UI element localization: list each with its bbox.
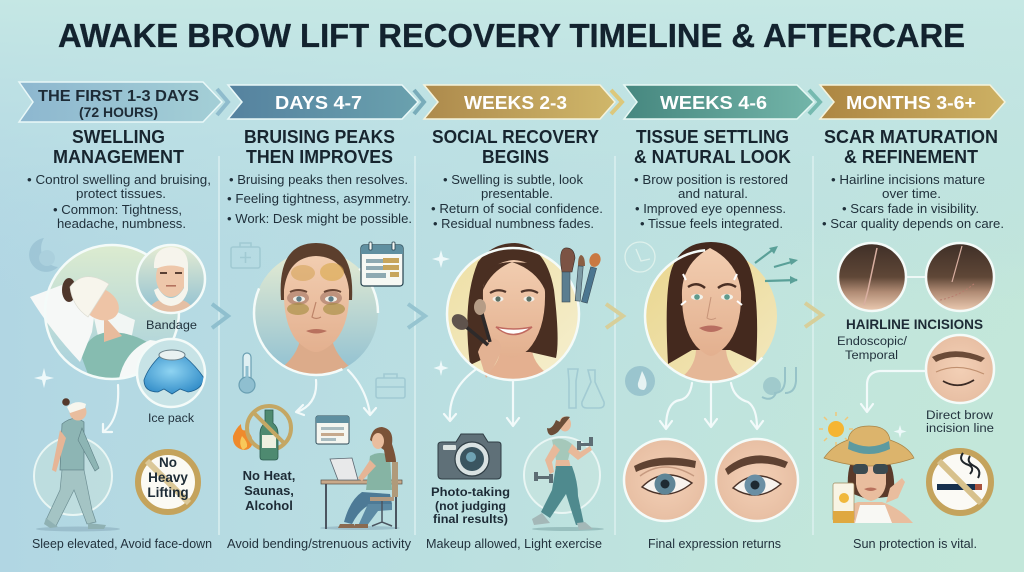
sparkles bbox=[432, 250, 450, 376]
caption: Makeup allowed, Light exercise bbox=[426, 537, 602, 551]
bullet text: tissue settling bbox=[634, 173, 788, 231]
icon: briefcase bbox=[376, 374, 405, 398]
icons: pale drop and stethoscope bbox=[625, 366, 796, 399]
icon: calendar bbox=[361, 242, 403, 286]
ribbon: days 4-7: DAYS 4-7 bbox=[275, 93, 362, 113]
panel: first 1-3 days bbox=[19, 82, 228, 551]
label: no heat bbox=[243, 468, 295, 513]
ribbon: months 3-6+: MONTHS 3-6+ bbox=[846, 93, 976, 113]
heading: bruising peaks bbox=[244, 127, 395, 167]
arrow: column 3 to 4 bbox=[606, 304, 623, 328]
heading: bruising peaks: BRUISING PEAKS bbox=[244, 127, 395, 147]
sparkle bbox=[894, 425, 906, 438]
arrow: column 1 to 2 bbox=[212, 304, 228, 328]
icon: no heavy lifting: Heavy bbox=[148, 470, 188, 485]
sparkle bbox=[34, 368, 54, 388]
bullet text: swelling management: • Control swelling and bruising, bbox=[27, 173, 211, 187]
label: endoscopic temporal bbox=[837, 336, 908, 362]
heading: swelling management bbox=[53, 127, 184, 167]
ribbon: the first 1-3 days bbox=[19, 82, 228, 122]
bullet text: scar maturation: • Scars fade in visibility. bbox=[842, 202, 979, 216]
illustration: woman working at desk bbox=[320, 427, 402, 530]
icon: no heavy lifting bbox=[138, 452, 198, 512]
label: photo-taking: Photo-taking bbox=[431, 485, 510, 499]
label: photo-taking: final results) bbox=[433, 512, 508, 526]
panel: weeks 4-6 bbox=[624, 85, 820, 551]
heading: swelling management: SWELLING bbox=[72, 127, 165, 147]
illustration: walking patient bbox=[34, 398, 120, 532]
illustration: smiling woman with brushes bbox=[447, 243, 579, 382]
illustration: woman natural look bbox=[645, 242, 777, 385]
illustration: eye after bbox=[716, 439, 798, 521]
bullet text: bruising: • Feeling tightness, asymmetry. bbox=[227, 192, 411, 206]
icon: pale bottles bbox=[568, 369, 604, 408]
label: no heat: Alcohol bbox=[245, 498, 293, 513]
illustration: woman with sun hat and sunscreen bbox=[824, 426, 914, 523]
bullet text: social recovery: • Return of social confidence. bbox=[431, 202, 603, 216]
heading: scar maturation: SCAR MATURATION bbox=[824, 127, 998, 147]
label: bandage: Bandage bbox=[146, 320, 197, 332]
bullet text: tissue settling: • Improved eye openness. bbox=[635, 202, 786, 216]
heading: bruising peaks: THEN IMPROVES bbox=[246, 147, 393, 167]
ribbon: months 3-6+ bbox=[820, 85, 1005, 119]
icon: first aid kit bbox=[231, 243, 260, 268]
illustration: patient resting in bed bbox=[30, 245, 185, 385]
icon: clock bbox=[625, 242, 655, 272]
heading: scar maturation bbox=[824, 127, 998, 167]
label: direct brow: Direct brow bbox=[926, 410, 994, 422]
panel: months 3-6+ bbox=[819, 85, 1005, 551]
label: no heat: No Heat, bbox=[243, 468, 295, 483]
icon: sun bbox=[819, 412, 853, 446]
illustration: light exercise bbox=[524, 416, 604, 531]
heading: social recovery: SOCIAL RECOVERY bbox=[432, 127, 599, 147]
arrow bbox=[861, 371, 925, 412]
heading: swelling management: MANAGEMENT bbox=[53, 147, 184, 167]
arrows bbox=[444, 370, 519, 426]
ribbon: days 4-7 bbox=[228, 85, 424, 119]
ribbon: the first 1-3 days: THE FIRST 1-3 DAYS bbox=[38, 88, 199, 105]
ribbon: weeks 2-3: WEEKS 2-3 bbox=[464, 93, 567, 113]
label: hairline incisions: HAIRLINE INCISIONS bbox=[846, 316, 983, 332]
icon: bandage bbox=[137, 245, 205, 313]
ribbon: weeks 4-6 bbox=[624, 85, 820, 119]
arrow: column 4 to 5 bbox=[805, 303, 822, 327]
icon: small calendar bbox=[316, 416, 349, 444]
icon: makeup brushes bbox=[561, 248, 602, 303]
heading: tissue settling: TISSUE SETTLING bbox=[636, 127, 789, 147]
label: photo-taking: (not judging bbox=[435, 499, 506, 513]
heading: social recovery bbox=[432, 127, 599, 167]
ribbon: weeks 2-3 bbox=[424, 85, 622, 119]
bullet text: tissue settling: and natural. bbox=[678, 187, 748, 201]
heading: tissue settling bbox=[634, 127, 791, 167]
bullet text: scar maturation: • Hairline incisions mature bbox=[831, 173, 985, 187]
ribbon: weeks 4-6: WEEKS 4-6 bbox=[660, 93, 767, 113]
connector bbox=[905, 276, 927, 278]
icon: ice pack bbox=[137, 339, 205, 407]
heading: scar maturation: & REFINEMENT bbox=[844, 147, 978, 167]
bullet text: bruising: • Bruising peaks then resolves. bbox=[229, 173, 408, 187]
icon: no heavy lifting: No bbox=[159, 455, 177, 470]
caption: Final expression returns bbox=[648, 537, 781, 551]
bullet text: bruising: • Work: Desk might be possible. bbox=[227, 212, 412, 226]
heading: tissue settling: & NATURAL LOOK bbox=[634, 147, 791, 167]
label: photo-taking bbox=[431, 485, 510, 526]
illustration: hairline scalp bbox=[838, 243, 906, 311]
bullet text: swelling management: protect tissues. bbox=[76, 187, 166, 201]
column dividers bbox=[219, 156, 813, 535]
label: endoscopic temporal: Endoscopic/ bbox=[837, 336, 908, 348]
panel: weeks 2-3 bbox=[424, 85, 622, 551]
arrows bbox=[296, 370, 376, 415]
title: AWAKE BROW LIFT RECOVERY TIMELINE & AFTERCARE bbox=[58, 17, 965, 54]
icon: thermometer bbox=[239, 353, 255, 393]
bullet text: scar maturation bbox=[822, 173, 1004, 231]
icon: no alcohol and flame bbox=[233, 406, 291, 460]
bullet text: social recovery bbox=[431, 173, 603, 231]
panel: days 4-7 bbox=[227, 85, 424, 551]
bullet text: bruising bbox=[227, 173, 412, 226]
bullet text: social recovery: • Swelling is subtle, look bbox=[443, 173, 584, 187]
bullet text: social recovery: • Residual numbness fades. bbox=[433, 217, 594, 231]
bullet text: tissue settling: • Tissue feels integrated. bbox=[640, 217, 783, 231]
illustration: eye before bbox=[624, 439, 706, 521]
caption: Sun protection is vital. bbox=[853, 537, 977, 551]
bullet text: scar maturation: • Scar quality depends on care. bbox=[822, 217, 1004, 231]
ribbon: the first 1-3 days: (72 HOURS) bbox=[79, 104, 158, 120]
bullet text: social recovery: presentable. bbox=[481, 187, 553, 201]
bullet text: swelling management: headache, numbness. bbox=[57, 217, 186, 231]
icon: moon bbox=[29, 238, 58, 272]
arrow: column 2 to 3 bbox=[408, 304, 425, 328]
bullet text: scar maturation: over time. bbox=[882, 187, 941, 201]
caption: Sleep elevated, Avoid face-down bbox=[32, 537, 212, 551]
illustration: hairline incision bbox=[926, 243, 994, 311]
arrow bbox=[103, 385, 118, 432]
icon: no smoking bbox=[929, 451, 991, 513]
icon: camera bbox=[438, 434, 501, 479]
label: direct brow bbox=[926, 410, 994, 435]
icon: lift arrows bbox=[755, 246, 798, 284]
caption: Avoid bending/strenuous activity bbox=[227, 537, 412, 551]
icon: no heavy lifting: Lifting bbox=[147, 485, 189, 500]
bullet text: swelling management bbox=[27, 173, 211, 231]
label: endoscopic temporal: Temporal bbox=[845, 350, 898, 362]
illustration: bruised face bbox=[254, 243, 378, 380]
label: ice pack: Ice pack bbox=[148, 413, 194, 425]
bullet text: tissue settling: • Brow position is restored bbox=[634, 173, 788, 187]
label: no heat: Saunas, bbox=[244, 483, 294, 498]
heading: social recovery: BEGINS bbox=[482, 147, 549, 167]
arrows bbox=[660, 383, 763, 429]
bullet text: swelling management: • Common: Tightness, bbox=[53, 203, 182, 217]
illustration: direct brow incision bbox=[926, 335, 994, 403]
label: direct brow: incision line bbox=[926, 423, 994, 435]
